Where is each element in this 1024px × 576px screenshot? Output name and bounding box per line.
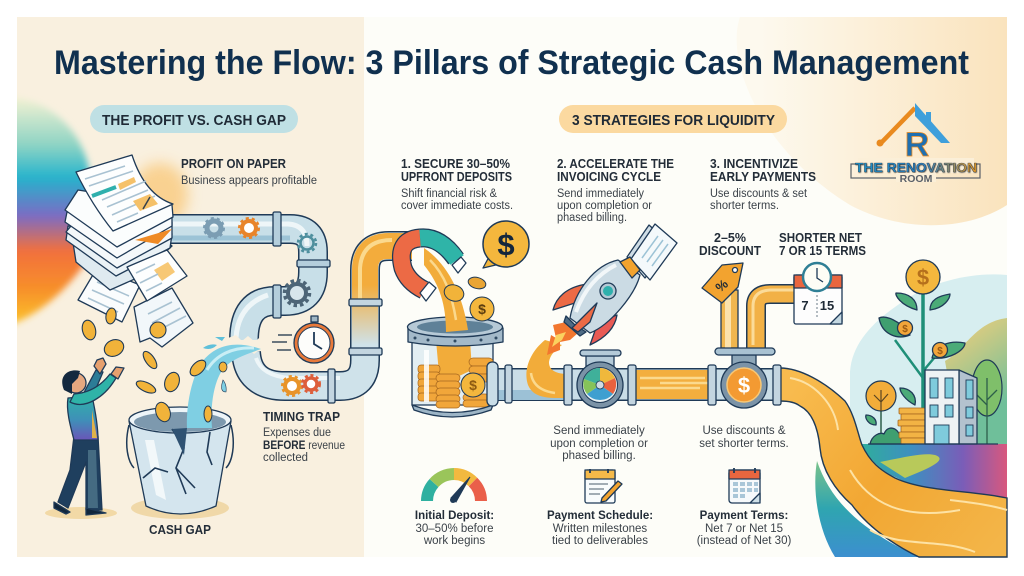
rocket flame xyxy=(547,322,578,355)
text: strategy 1: 1. SECURE 30–50% xyxy=(401,157,510,171)
left section background xyxy=(17,17,364,557)
pill: the profit vs. cash gap xyxy=(90,105,298,133)
text: payment terms: Payment Terms: xyxy=(700,510,788,522)
icon: gears on pipes xyxy=(204,218,320,396)
label: shorter net terms: 7 OR 15 TERMS xyxy=(779,244,866,258)
text: use discounts note: Use discounts & xyxy=(702,425,786,437)
label: shorter net terms xyxy=(779,231,866,258)
text: payment schedule xyxy=(547,510,653,547)
broken upper pipe xyxy=(165,212,330,345)
text: timing trap: collected xyxy=(263,452,308,464)
icon: trees and bush xyxy=(866,360,1002,444)
lower pipe with orange flow xyxy=(234,240,412,403)
icon: building xyxy=(925,370,977,444)
text: payment terms: Net 7 or Net 15 xyxy=(705,523,783,535)
stack layers xyxy=(72,236,172,290)
icon: person reaching up xyxy=(45,358,124,519)
text: strategy 2: upon completion or xyxy=(557,200,652,212)
text: initial deposit: Initial Deposit: xyxy=(415,510,494,522)
upper branch pipes xyxy=(721,290,795,348)
icon: coin stack beside building xyxy=(898,408,925,444)
icon: stack of profit papers xyxy=(65,155,193,347)
text: timing trap: TIMING TRAP xyxy=(263,410,340,424)
valve 2: $ xyxy=(738,373,750,398)
text: initial deposit: work begins xyxy=(423,535,485,547)
valve 1 xyxy=(564,350,636,408)
icon: calendar with clock: 7 xyxy=(801,298,809,313)
left rainbow wash xyxy=(10,97,188,325)
text: strategy 1: cover immediate costs. xyxy=(401,200,513,212)
icon: cracked bucket xyxy=(127,407,233,519)
logo: the renovation room: R xyxy=(905,126,929,164)
text: strategy 2: 2. ACCELERATE THE xyxy=(557,157,674,171)
icon: calendar with clock xyxy=(794,263,842,324)
text: payment terms: (instead of Net 30) xyxy=(697,535,791,547)
icon: rocket xyxy=(547,224,677,355)
rear falling sheets xyxy=(134,288,193,347)
valve 2 xyxy=(708,348,781,408)
text: strategy 1 xyxy=(401,157,513,212)
icon: money tree: $ xyxy=(937,346,943,357)
pill: 3 strategies for liquidity: 3 STRATEGIES FOR LIQUIDITY xyxy=(572,112,775,129)
jagged break xyxy=(228,335,262,345)
orange flow into pipe xyxy=(526,340,565,398)
icon: money tree: $ xyxy=(902,324,908,335)
logo: the renovation room: ROOM xyxy=(900,173,933,185)
text: strategy 2: Send immediately xyxy=(557,188,644,200)
icon: money tree: $ xyxy=(917,265,929,290)
pill: the profit vs. cash gap: THE PROFIT VS. CASH GAP xyxy=(102,112,286,129)
icon: payment terms calendar xyxy=(729,468,760,503)
jar with coins: $ xyxy=(469,377,477,393)
text: strategy 1: UPFRONT DEPOSITS xyxy=(401,170,512,184)
ground line xyxy=(868,443,998,445)
text: payment terms xyxy=(697,510,791,547)
text: payment schedule: Payment Schedule: xyxy=(547,510,653,522)
top sheet xyxy=(76,155,173,231)
text: strategy 3: EARLY PAYMENTS xyxy=(710,170,816,184)
icon: calendar with clock: 15 xyxy=(820,298,834,313)
river of cash xyxy=(780,368,1007,557)
text: profit on paper: Business appears profitable xyxy=(181,175,317,187)
icon: coins dropping into jar xyxy=(442,275,494,321)
pipe flanges xyxy=(349,299,382,306)
text: strategy 3: 3. INCENTIVIZE xyxy=(710,157,798,171)
text: strategy 3 xyxy=(710,157,816,212)
text: strategy 3: shorter terms. xyxy=(710,200,779,212)
icon: dollar speech coin xyxy=(483,221,529,268)
text: send immediately note: Send immediately xyxy=(553,425,645,437)
magnet with orange stream xyxy=(401,238,468,332)
text: profit on paper: PROFIT ON PAPER xyxy=(181,157,286,171)
text: strategy 1: Shift financial risk & xyxy=(401,188,497,200)
label: discount: 2–5% xyxy=(714,231,746,245)
icon: stopwatch xyxy=(272,316,334,363)
coins over water xyxy=(187,357,209,379)
text: profit on paper xyxy=(181,157,317,187)
label: shorter net terms: SHORTER NET xyxy=(779,231,862,245)
coin stacks in jar xyxy=(418,358,493,408)
text: timing trap: Expenses due xyxy=(263,427,331,439)
text: initial deposit xyxy=(415,510,494,547)
text: use discounts note xyxy=(699,425,789,450)
invoice papers xyxy=(627,225,670,278)
icon: gauge xyxy=(427,474,481,503)
label: discount: DISCOUNT xyxy=(699,244,761,258)
outlet flange xyxy=(487,362,498,406)
pill: 3 strategies for liquidity xyxy=(559,105,787,133)
icon: dollar speech coin: $ xyxy=(497,227,515,262)
text: initial deposit: 30–50% before xyxy=(415,523,494,535)
label: discount xyxy=(699,231,761,258)
jar with coins xyxy=(408,317,503,417)
icon: water stream xyxy=(153,337,261,428)
text: timing trap: BEFORE revenue xyxy=(263,440,345,452)
text: send immediately note: phased billing. xyxy=(562,450,636,462)
text: use discounts note: set shorter terms. xyxy=(699,438,789,450)
pipe flanges xyxy=(273,212,281,246)
text: strategy 2 xyxy=(557,157,674,224)
icon: falling coins xyxy=(80,307,209,396)
text: payment schedule: Written milestones xyxy=(553,523,647,535)
text: strategy 2: phased billing. xyxy=(557,212,627,224)
logo: the renovation room xyxy=(851,103,980,185)
river highlights xyxy=(790,378,1007,552)
text: send immediately note xyxy=(550,425,648,462)
icon: payment schedule notepad xyxy=(585,469,622,503)
text: payment schedule: tied to deliverables xyxy=(552,535,648,547)
right landscape background xyxy=(815,274,1007,557)
main pipe to valves xyxy=(487,340,780,406)
title: Mastering the Flow: 3 Pillars of Strategic Cash Management xyxy=(54,44,969,82)
text: timing trap xyxy=(263,410,345,464)
label: cash gap: CASH GAP xyxy=(149,523,211,537)
top-right peach wash xyxy=(737,17,1007,225)
icon: discount tag xyxy=(702,263,743,303)
icon: money tree xyxy=(879,260,965,410)
icon: coins dropping into jar: $ xyxy=(478,301,486,317)
text: strategy 2: INVOICING CYCLE xyxy=(557,170,661,184)
icon: discount tag: % xyxy=(712,276,731,295)
logo: the renovation room: THE RENOVATION xyxy=(855,161,977,175)
text: strategy 3: Use discounts & set xyxy=(710,188,808,200)
text: send immediately note: upon completion or xyxy=(550,438,648,450)
